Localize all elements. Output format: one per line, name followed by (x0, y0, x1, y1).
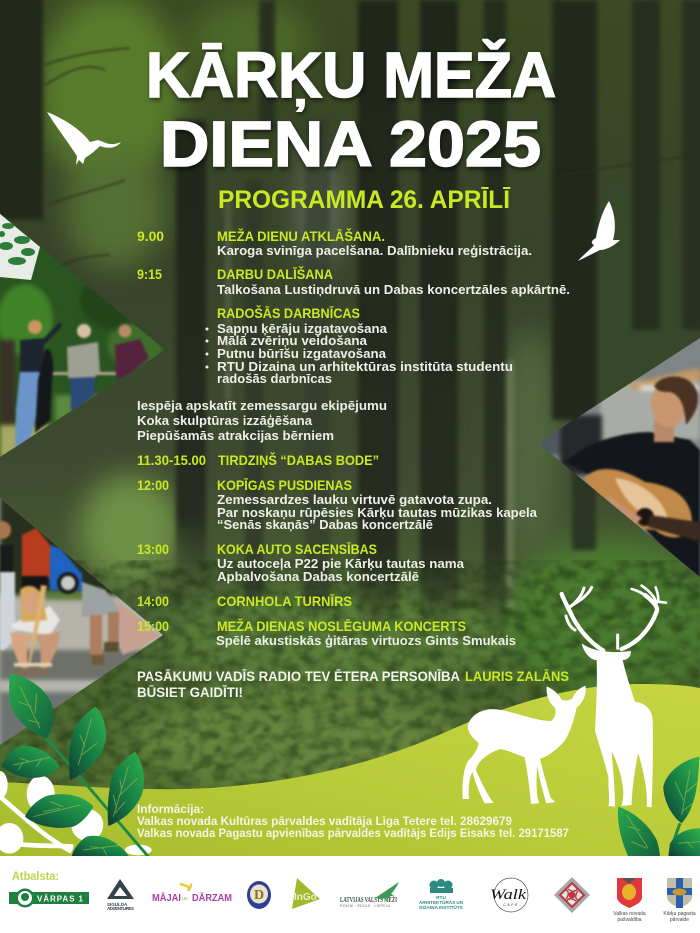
contact information: Informācija: (137, 802, 204, 816)
photo: flag raising (0, 210, 170, 460)
programme item creative workshops: RTU Dizaina un arhitektūras institūta studentu (217, 359, 513, 374)
programme item wooden car race: KOKA AUTO SACENSĪBAS (217, 542, 377, 557)
logo: RTU (419, 879, 464, 910)
contact information: Valkas novada Kultūras pārvaldes vadītāja Līga Tetere tel. 28629679 (137, 814, 512, 828)
photo: guitarist (530, 330, 700, 580)
logo: Sigulda Adventures: SIGULDA (107, 902, 128, 907)
logo: Vārpas 1 (9, 888, 89, 908)
leaf (25, 794, 93, 828)
contact information (137, 802, 569, 840)
programme item lunch: Par noskaņu rūpēsies Kārķu tautas mūzikas kapela (217, 505, 538, 520)
flag (0, 214, 40, 280)
programme item lunch: “Senās skaņās” Dabas koncertzālē (217, 517, 433, 532)
logo: Vārpas 1: VĀRPAS 1 (37, 894, 84, 904)
programme item 9.00: 9.00 (137, 229, 164, 244)
programme item creative workshops: Mālā zvēriņu veidošana (217, 333, 368, 348)
logo: RTU: RTU (436, 895, 446, 901)
legs of standing man (82, 582, 122, 665)
contact information: Valkas novada Pagastu apvienības pārvaldes vadītājs Edijs Eisaks tel. 29171587 (137, 826, 569, 840)
logo: Mājai un dārzam: MĀJAI (152, 892, 181, 904)
blue car (48, 545, 82, 594)
programme item lunch (137, 478, 538, 532)
photo: wooden car race (0, 495, 170, 752)
programme item 9.00: Karoga svinīga pacelšana. Dalībnieku reģistrācija. (217, 243, 532, 258)
programme item 9:15 (137, 267, 570, 297)
bird left (47, 112, 121, 165)
logo: Mājai un dārzam: DĀRZAM (192, 892, 232, 904)
programme item wooden car race: Apbalvošana Dabas koncertzālē (217, 569, 419, 584)
programme item wooden car race (137, 542, 465, 584)
leaf (663, 757, 699, 823)
programme item creative workshops: radošās darbnīcas (217, 371, 332, 386)
title: KĀRĶU MEŽA (146, 38, 556, 112)
host announcement: PASĀKUMU VADĪS RADIO TEV ĒTERA PERSONĪBA (137, 668, 460, 684)
logo: RTU: ARHITEKTŪRAS UN (419, 899, 464, 905)
additional activities: Iespēja apskatīt zemessargu ekipējumu (137, 398, 387, 413)
programme item closing concert: 15:00 (137, 619, 169, 634)
logo: Walk cafe (490, 878, 528, 912)
programme item closing concert: Spēlē akustiskās ģitāras virtuozs Gints Smukais (216, 633, 516, 648)
programme item market: 11.30-15.00 (137, 453, 206, 468)
additional activities: Piepūšamās atrakcijas bērniem (137, 428, 334, 443)
host announcement (137, 668, 569, 700)
logo: Latvijas valsts meži: LATVIJAS VALSTS MEŽI (340, 894, 397, 904)
logo: Kārķi parish crest (663, 878, 696, 923)
programme item market (137, 453, 379, 468)
logo: InGo (292, 878, 320, 909)
leaf (2, 746, 60, 778)
crouching girl with wooden car (10, 585, 60, 674)
programme item lunch: Zemessardzes lauku virtuvē gatavota zupa. (217, 492, 492, 507)
head (650, 388, 686, 427)
programme item lunch: 12:00 (137, 478, 169, 493)
subtitle: PROGRAMMA 26. APRĪLĪ (218, 186, 511, 214)
stag silhouette (562, 586, 666, 807)
logo: RTU: DIZAINA INSTITŪTS (419, 904, 463, 910)
logo: Kārķi parish crest: Kārķu pagasta (663, 911, 696, 917)
leaf (618, 807, 660, 857)
footer sponsors panel (0, 856, 700, 933)
support label: Atbalsta: (12, 871, 59, 883)
logo: Latvijas valsts meži (340, 882, 399, 908)
programme item 9:15: DARBU DALĪŠANA (217, 267, 333, 282)
programme item market: TIRDZIŅŠ “DABAS BODE” (218, 453, 379, 468)
logo: InGo: InGo (294, 892, 317, 903)
torso (565, 432, 700, 580)
leaf veins (13, 687, 137, 855)
programme item creative workshops: RADOŠĀS DARBNĪCAS (217, 306, 360, 321)
leaf (108, 752, 144, 826)
logo: Kārķi parish crest: pārvalde (670, 917, 689, 923)
programme item closing concert (137, 619, 516, 648)
programme item 9.00 (137, 229, 532, 258)
bird right (578, 201, 620, 261)
programme item closing concert: MEŽA DIENAS NOSLĒGUMA KONCERTS (217, 619, 466, 634)
logo: Latvijas valsts meži: ROKIŅI · ĒDOLE · LIEPEJA (340, 904, 391, 908)
logo: Valka municipality crest (613, 878, 646, 923)
man in maroon (115, 324, 149, 378)
logo: Sigulda Adventures (107, 879, 134, 911)
leaf (9, 673, 53, 738)
programme item wooden car race: 13:00 (137, 542, 169, 557)
title: DIENA 2025 (160, 108, 541, 180)
woman on the left (0, 521, 15, 650)
antlers (562, 586, 666, 651)
logo: ornament (554, 877, 590, 913)
neck (654, 420, 674, 442)
left leaf branch (2, 673, 148, 857)
host announcement: BŪSIET GAIDĪTI! (137, 684, 243, 700)
programme item cornhole (137, 594, 352, 609)
host announcement: LAURIS ZALĀNS (465, 668, 569, 684)
programme item creative workshops: Sapņu ķērāju izgatavošana (217, 321, 388, 336)
logo: Sigulda Adventures: ADVENTURES (107, 906, 134, 911)
right leaves (618, 757, 700, 857)
person in red shirt (22, 528, 50, 578)
person in black (35, 349, 53, 433)
person raising flag (15, 320, 62, 447)
older man (67, 324, 100, 411)
programme item wooden car race: Uz autoceļa P22 pie Kārķu tautas nama (217, 556, 465, 571)
doe silhouette (463, 687, 585, 803)
programme item cornhole: CORNHOLA TURNĪRS (217, 594, 352, 609)
title (146, 38, 556, 180)
programme item cornhole: 14:00 (137, 594, 169, 609)
logo: Walk cafe: Walk (490, 887, 526, 903)
programme item creative workshops: Putnu būrīšu izgatavošana (217, 346, 387, 361)
logo: Valka municipality crest: pašvaldība (617, 917, 642, 923)
leaf (668, 828, 700, 857)
guitar (584, 469, 700, 543)
additional activities (137, 398, 387, 443)
logo: Mājai un dārzam: un (182, 896, 188, 902)
leaf (69, 707, 106, 780)
additional activities: Koka skulptūras izzāģēšana (137, 413, 313, 428)
programme item 9:15: 9:15 (137, 267, 162, 282)
logo: Walk cafe: CAFE (503, 903, 519, 907)
programme item lunch: KOPĪGAS PUSDIENAS (217, 478, 352, 493)
leaf (72, 836, 128, 857)
white branch decoration (0, 771, 152, 855)
lime green hill (0, 684, 700, 860)
logo: Mājai un dārzam (152, 884, 232, 904)
logo: round D badge (247, 881, 271, 909)
programme item 9.00: MEŽA DIENU ATKLĀŠANA. (217, 229, 385, 244)
programme item creative workshops (206, 306, 513, 386)
programme item 9:15: Talkošana Lustiņdruvā un Dabas koncertzāles apkārtnē. (217, 282, 570, 297)
logo: round D badge: D (254, 888, 264, 903)
logo: Valka municipality crest: Valkas novada (613, 911, 646, 917)
